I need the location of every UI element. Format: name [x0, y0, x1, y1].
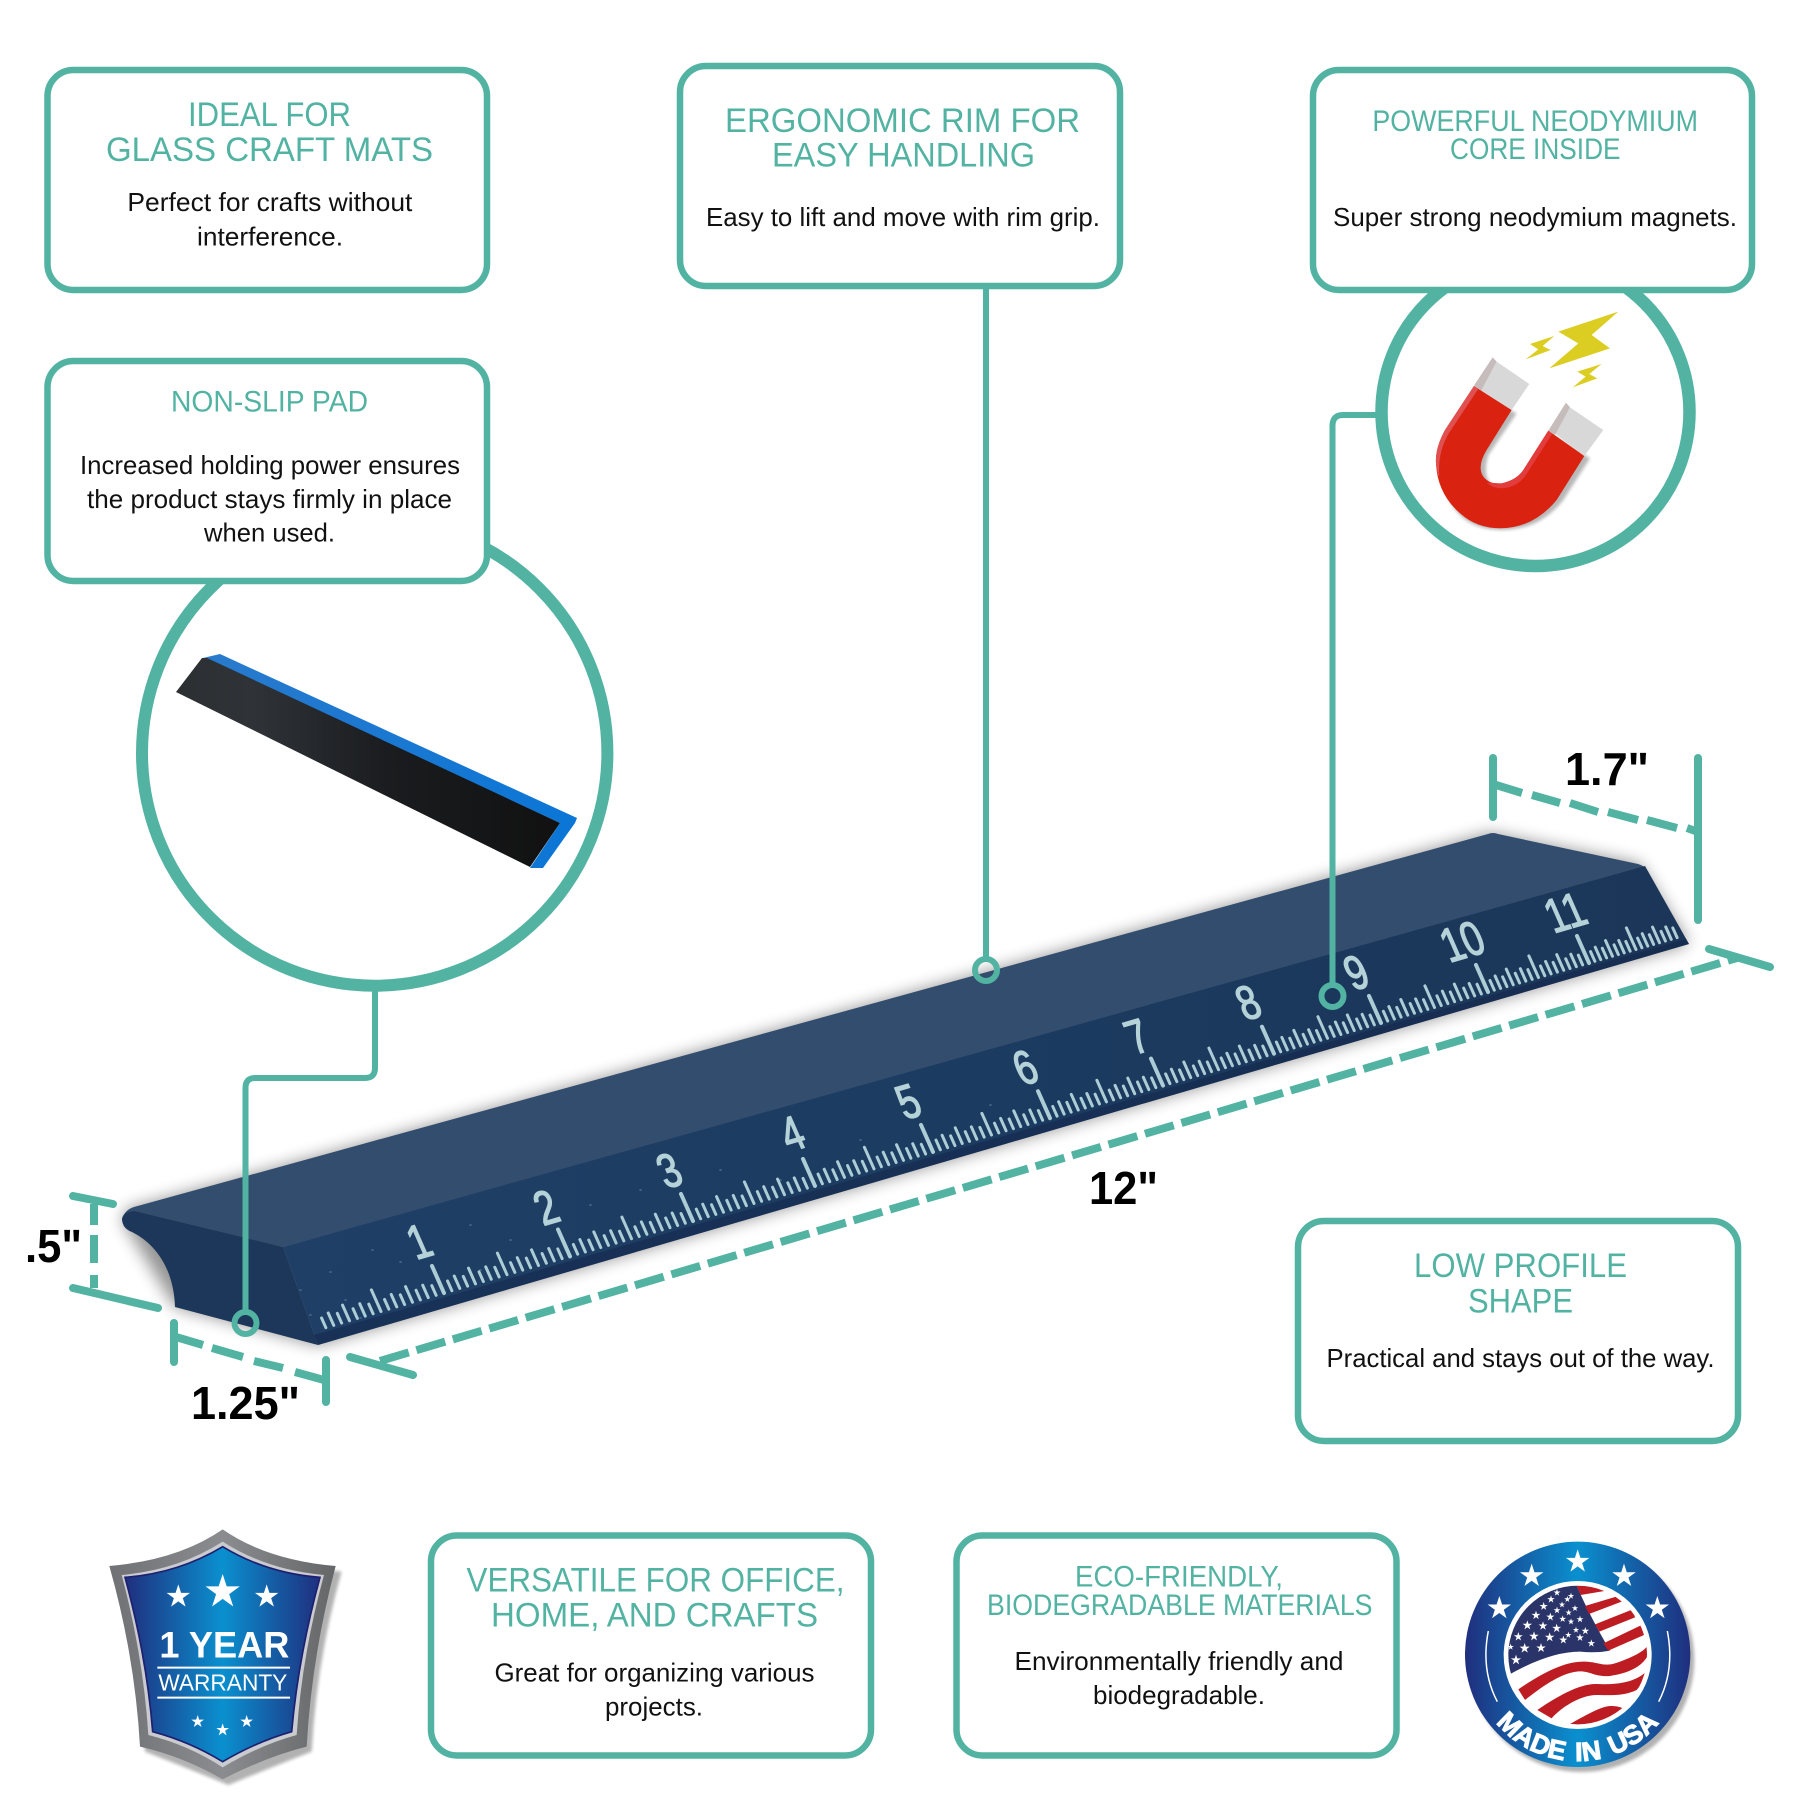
connector: magnet core to ruler [1322, 415, 1380, 1007]
panel: eco-friendly: Environmentally friendly and [1014, 1646, 1344, 1676]
panel: non-slip pad [48, 361, 487, 581]
ruler end face [122, 1211, 318, 1345]
dimension: width 1.7 inch [1493, 743, 1698, 920]
panel: versatile use: projects. [605, 1692, 703, 1722]
dimension: length 12 inch [350, 949, 1770, 1375]
ruler numerals [399, 883, 1595, 1270]
ruler numerals: 1 [399, 1215, 440, 1270]
icon: pad strip [176, 654, 577, 868]
panel: neodymium core: POWERFUL NEODYMIUM [1372, 105, 1698, 138]
ruler numerals: 10 [1432, 912, 1493, 973]
panel: non-slip pad: Increased holding power ensures [80, 450, 460, 480]
panel: ideal for glass craft mats: GLASS CRAFT MATS [106, 131, 433, 169]
connector: ergonomic rim to ruler [975, 285, 997, 981]
ruler front face [283, 866, 1689, 1345]
dimension: width 1.25 inch: 1.25" [191, 1377, 300, 1429]
panel: neodymium core: Super strong neodymium magnets. [1333, 202, 1737, 232]
panel: low profile shape: SHAPE [1468, 1282, 1573, 1320]
panel: ergonomic rim: EASY HANDLING [772, 136, 1035, 174]
panel: versatile use [431, 1536, 871, 1756]
panel: neodymium core: CORE INSIDE [1450, 133, 1620, 166]
panel: low profile shape: Practical and stays out of the way. [1326, 1343, 1714, 1373]
panel: eco-friendly: BIODEGRADABLE MATERIALS [987, 1589, 1372, 1622]
panel: low profile shape: LOW PROFILE [1414, 1247, 1627, 1285]
panel: non-slip pad: NON-SLIP PAD [171, 386, 368, 418]
ruler numerals: 11 [1536, 883, 1595, 944]
ruler numerals: 3 [649, 1144, 690, 1199]
panel: versatile use: HOME, AND CRAFTS [491, 1596, 818, 1634]
icon: horseshoe magnet [1436, 312, 1618, 530]
panel: neodymium core [1313, 70, 1752, 290]
ruler numerals: 7 [1117, 1010, 1158, 1065]
panel: eco-friendly: biodegradable. [1093, 1680, 1265, 1710]
ruler numerals: 2 [526, 1181, 567, 1236]
panel: ideal for glass craft mats: IDEAL FOR [188, 96, 351, 134]
panel: low profile shape [1298, 1221, 1738, 1441]
panel: ideal for glass craft mats: interference. [197, 222, 343, 252]
ruler numerals: 9 [1336, 946, 1377, 1001]
badge: 1 year warranty shield: WARRANTY [158, 1670, 287, 1696]
badge: made in USA [1465, 1542, 1696, 1774]
panel: ergonomic rim [680, 66, 1120, 286]
ruler numerals: 6 [1005, 1041, 1046, 1096]
icon: rim stars [1488, 1549, 1669, 1618]
connector: non-slip pad to ruler [234, 985, 375, 1334]
icon: stars [167, 1574, 278, 1735]
panel: versatile use: VERSATILE FOR OFFICE, [466, 1562, 844, 1600]
ruler speckles [300, 1105, 991, 1318]
panel: eco-friendly: ECO-FRIENDLY, [1075, 1560, 1283, 1594]
ruler numerals: 5 [888, 1075, 929, 1130]
ruler product [122, 833, 1689, 1345]
callout circle: magnet [1382, 258, 1690, 566]
icon: lightning bolts [1526, 312, 1618, 387]
ruler numerals: 4 [772, 1107, 813, 1162]
panel: eco-friendly [956, 1536, 1396, 1756]
badge: 1 year warranty shield: 1 YEAR [159, 1625, 289, 1666]
panel: non-slip pad: when used. [203, 518, 335, 548]
panel: ergonomic rim: ERGONOMIC RIM FOR [725, 102, 1080, 140]
dimension: height .5 inch: .5" [25, 1220, 82, 1272]
panel: versatile use: Great for organizing various [494, 1658, 814, 1688]
dimension: height .5 inch [25, 1196, 158, 1308]
ruler scale ticks [316, 916, 1677, 1328]
dimension: width 1.7 inch: 1.7" [1565, 743, 1649, 795]
panel: ideal for glass craft mats: Perfect for crafts without [127, 187, 413, 217]
panel: ergonomic rim: Easy to lift and move with rim grip. [706, 202, 1100, 232]
callout circle: non-slip pad [142, 520, 607, 986]
dimension: length 12 inch: 12" [1089, 1162, 1158, 1214]
badge: 1 year warranty shield [109, 1529, 342, 1785]
dimension: width 1.25 inch [174, 1323, 326, 1429]
badge: made in USA: MADE IN USA [1496, 1710, 1660, 1762]
icon: american flag [1500, 1583, 1647, 1725]
panel: ideal for glass craft mats [48, 70, 487, 290]
ruler top face [122, 833, 1647, 1247]
panel: non-slip pad: the product stays firmly in place [87, 484, 452, 514]
ruler numerals: 8 [1228, 976, 1269, 1031]
